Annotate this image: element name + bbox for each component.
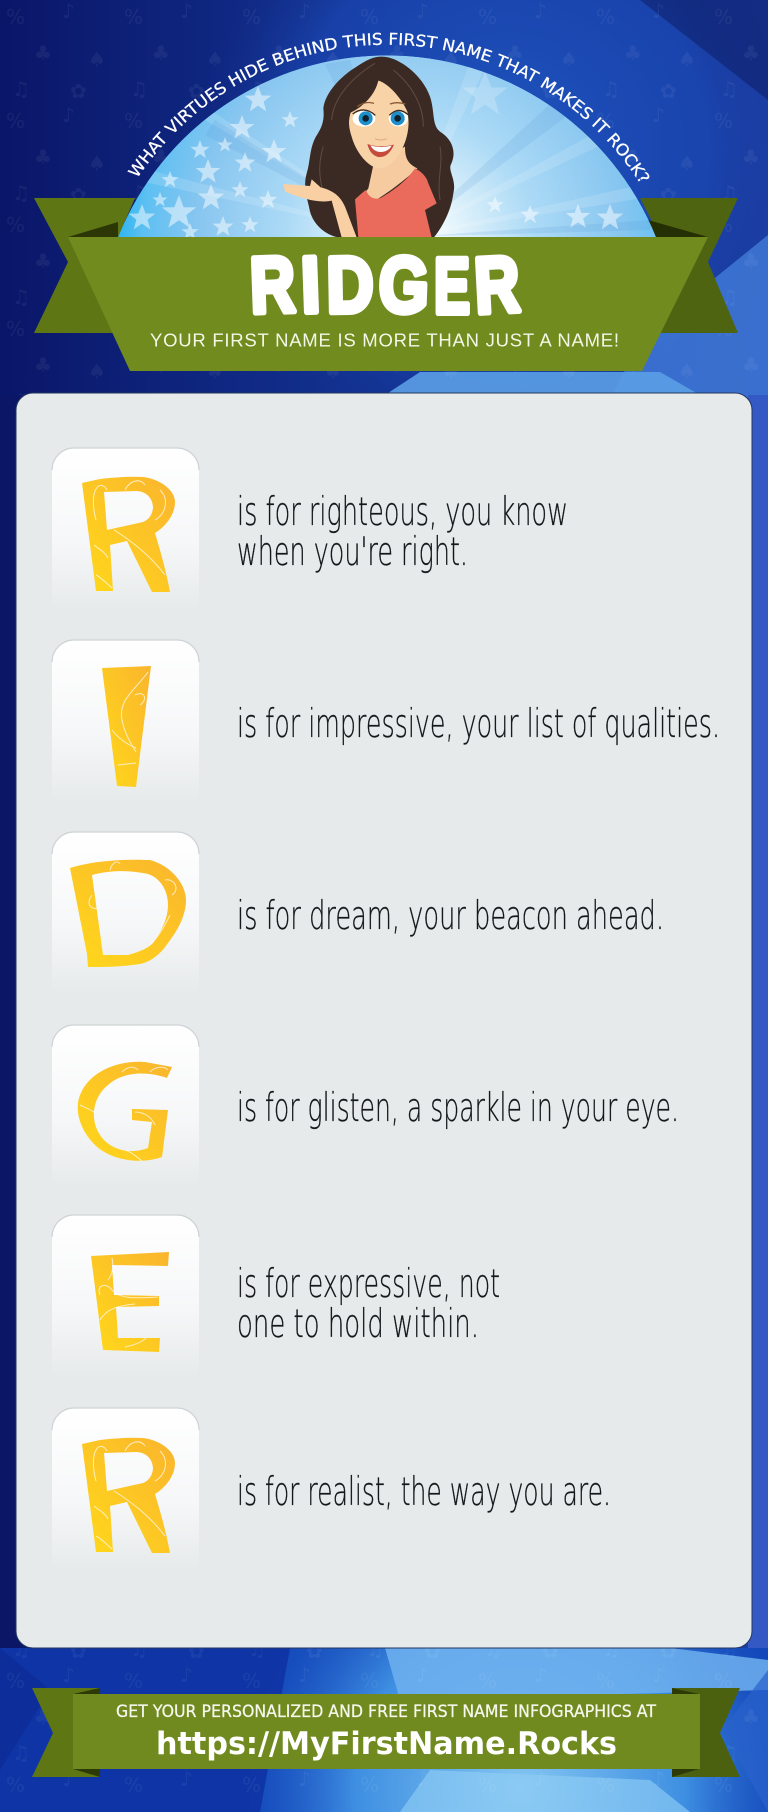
letter I bbox=[102, 666, 151, 787]
arched heading: WHAT VIRTUES HIDE BEHIND THIS FIRST NAME THAT MAKES IT ROCK? bbox=[127, 32, 650, 182]
content panel bbox=[16, 393, 752, 1648]
woman character bbox=[283, 57, 454, 237]
hair highlights bbox=[320, 63, 441, 200]
footer ribbon body bbox=[73, 1694, 700, 1769]
text: is for expressive, not bbox=[237, 1262, 500, 1307]
face bbox=[349, 81, 409, 168]
row 2: I bbox=[52, 640, 720, 812]
row 6: R bbox=[52, 1408, 611, 1580]
row 1: R bbox=[52, 448, 568, 620]
letter tile bbox=[52, 832, 199, 1004]
row 4: G bbox=[52, 1025, 679, 1197]
left ribbon tail bbox=[34, 198, 135, 333]
row 5: E bbox=[52, 1215, 500, 1387]
footer ribbon tails bbox=[32, 1688, 740, 1777]
name title: R bbox=[472, 239, 522, 330]
right ribbon tail bbox=[640, 198, 738, 333]
footer caption: GET YOUR PERSONALIZED AND FREE FIRST NAME INFOGRAPHICS AT bbox=[116, 1702, 657, 1722]
name title: G bbox=[377, 239, 431, 330]
tagline: YOUR FIRST NAME IS MORE THAN JUST A NAME! bbox=[150, 330, 619, 350]
text: is for righteous, you know bbox=[237, 490, 568, 535]
text bbox=[237, 490, 568, 575]
letter tile bbox=[52, 640, 199, 812]
letter tile bbox=[52, 1215, 199, 1387]
sunburst dome bbox=[118, 55, 656, 239]
name title bbox=[248, 239, 522, 330]
eyes bbox=[353, 103, 408, 127]
footer ribbon bbox=[32, 1688, 740, 1777]
footer url: https://MyFirstName.Rocks bbox=[156, 1726, 617, 1762]
letter tile bbox=[52, 1025, 199, 1197]
name title: R bbox=[248, 239, 297, 330]
text bbox=[237, 1262, 500, 1347]
letter G bbox=[78, 1062, 172, 1161]
letter tile bbox=[52, 1408, 199, 1580]
row 3: D bbox=[52, 832, 664, 1004]
main ribbon bbox=[68, 237, 708, 371]
name title: E bbox=[434, 241, 470, 330]
text: one to hold within. bbox=[237, 1302, 479, 1347]
name title: I bbox=[299, 240, 322, 329]
letter D bbox=[70, 860, 186, 967]
text: when you're right. bbox=[237, 530, 468, 575]
name title: D bbox=[326, 240, 374, 329]
arm and hand bbox=[283, 179, 357, 237]
mouth bbox=[367, 139, 394, 157]
letter E bbox=[91, 1252, 169, 1352]
letter R bbox=[82, 1438, 175, 1553]
shirt bbox=[355, 168, 437, 237]
neck bbox=[363, 147, 417, 202]
hair bbox=[305, 57, 454, 237]
letter R bbox=[82, 477, 175, 592]
letter tile bbox=[52, 448, 199, 620]
